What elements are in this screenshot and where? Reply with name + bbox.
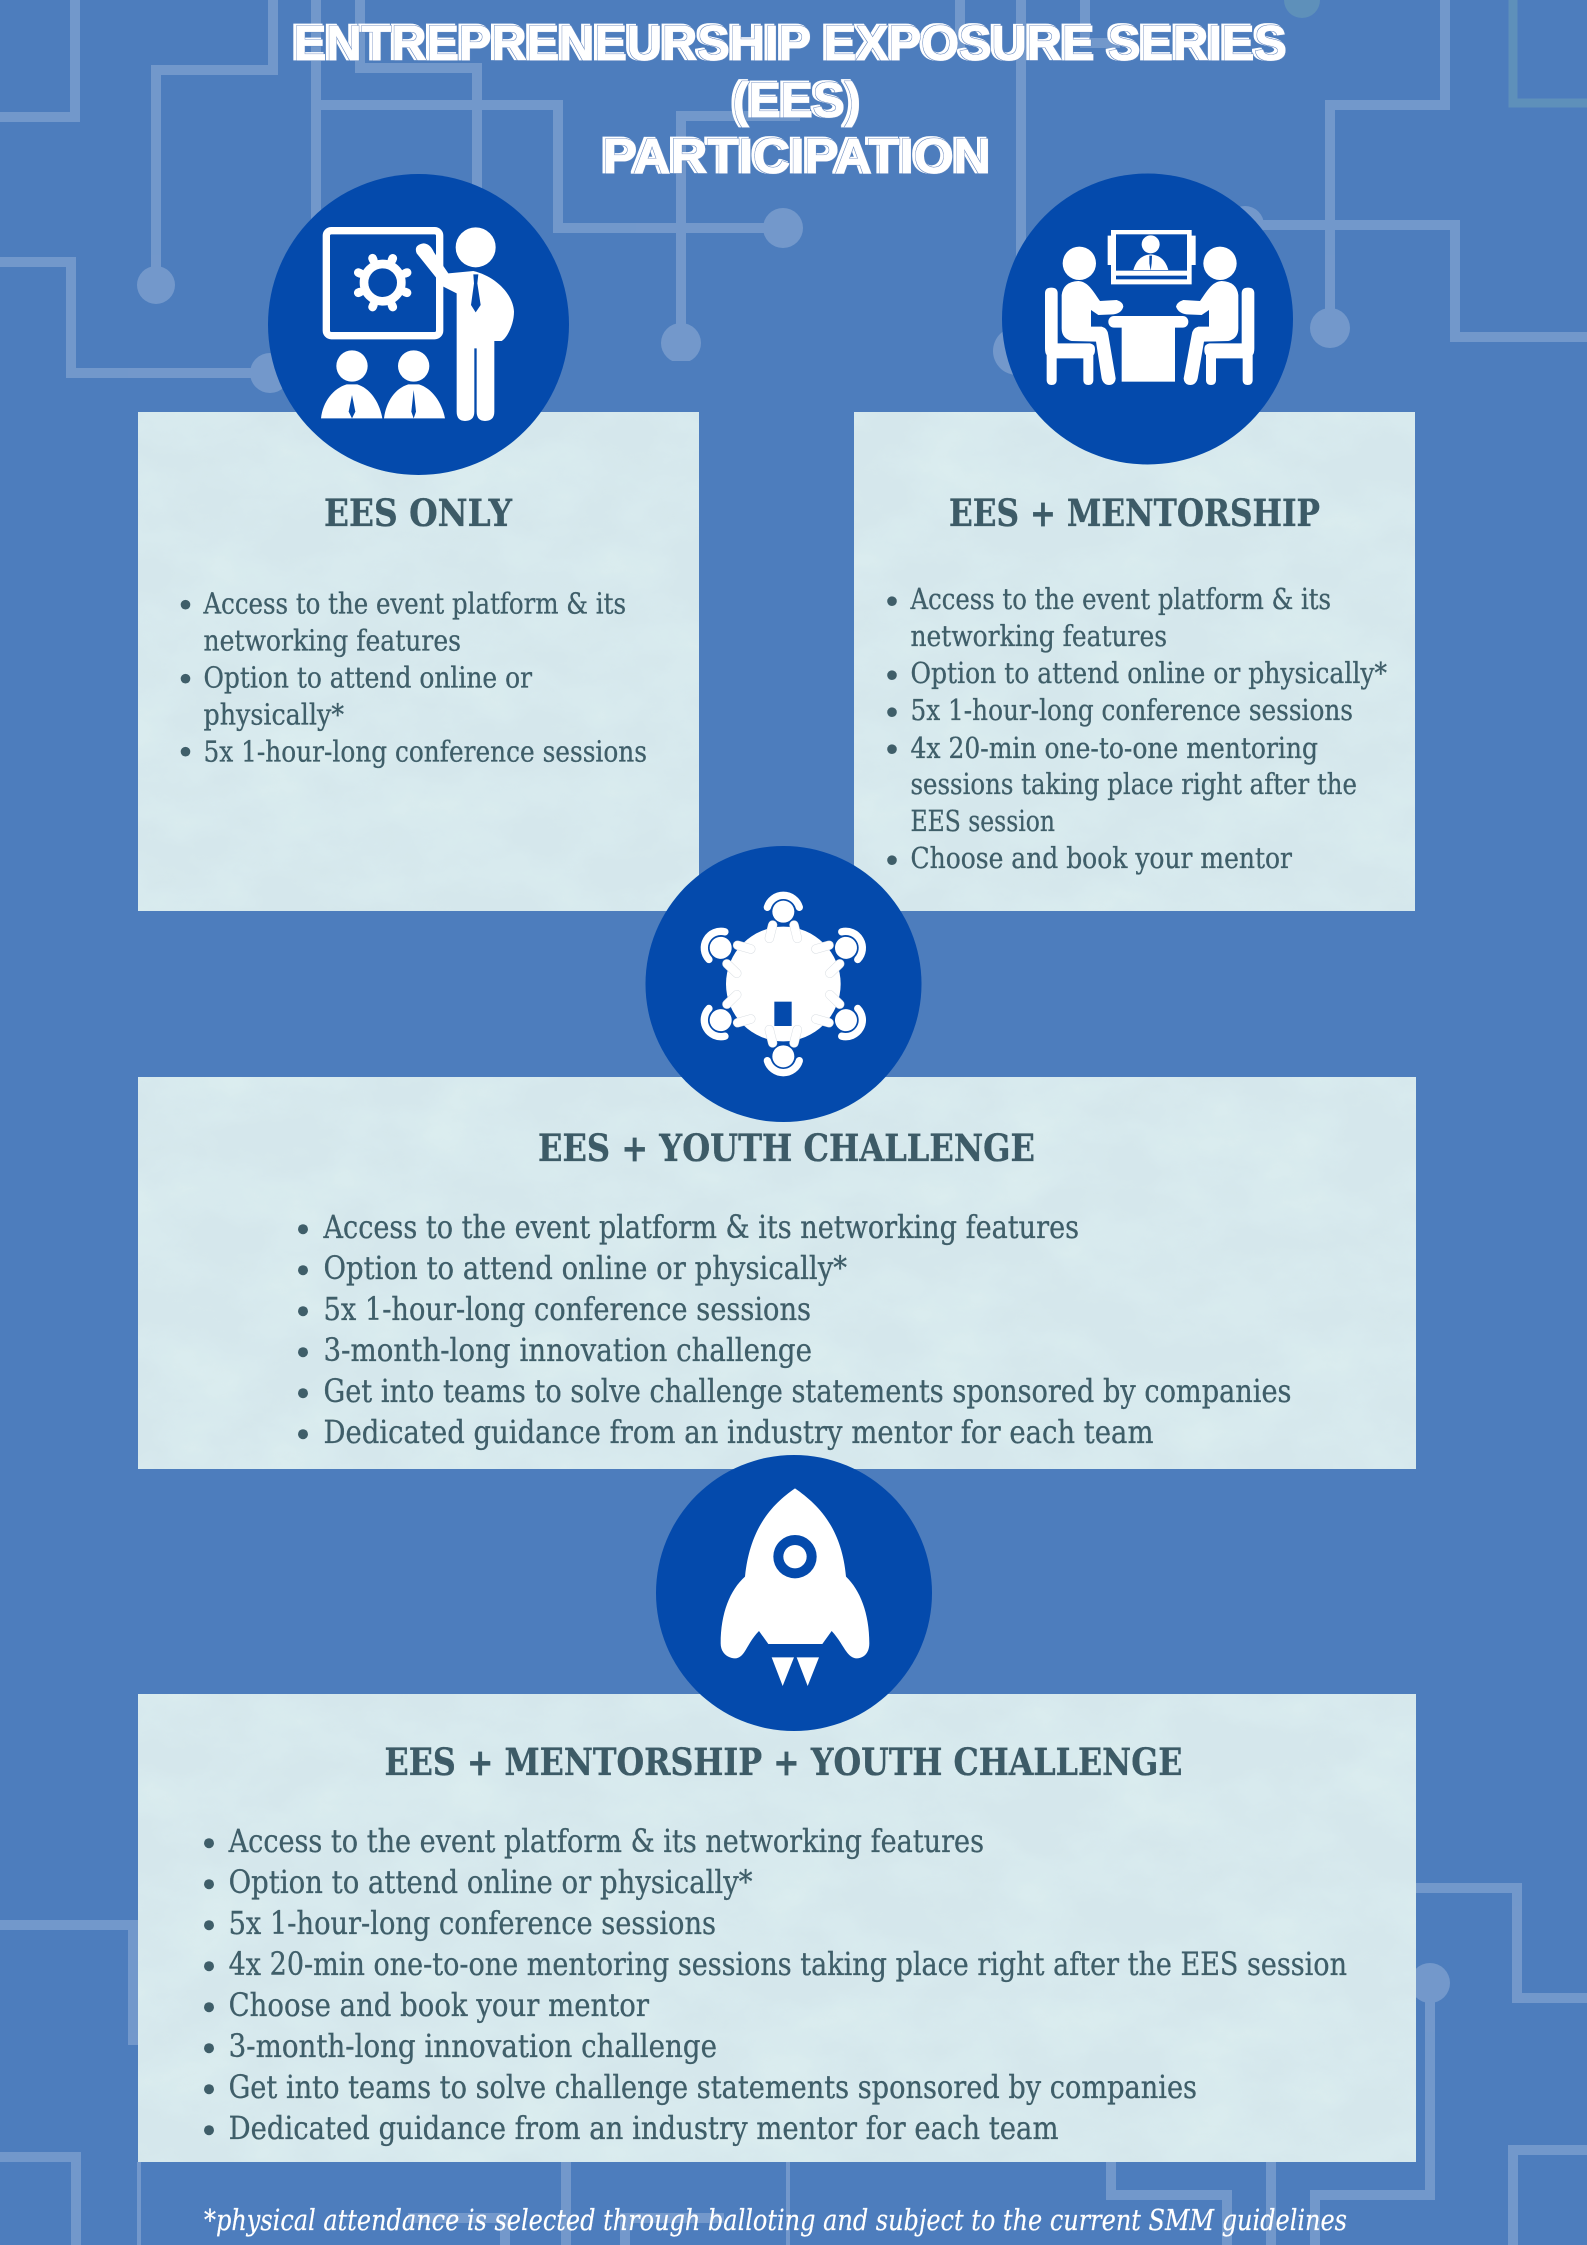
- list: combined package benefits: 3-month-long innovation challenge: [229, 2029, 717, 2065]
- panel: EES + youth challenge: [138, 1077, 1416, 1469]
- list: EES + youth challenge benefits: Get into teams to solve challenge statements sponsored by companies: [324, 1374, 1292, 1410]
- icon: presenter with gear board and audience: [268, 174, 569, 475]
- list: combined package benefits: 4x 20-min one-to-one mentoring sessions taking place right after the EES session: [229, 1947, 1347, 1983]
- list: combined package benefits: Option to attend online or physically*: [229, 1865, 753, 1901]
- title: [294, 17, 1287, 184]
- list: EES + mentorship benefits: sessions taking place right after the: [910, 767, 1357, 801]
- icon: rocket: [656, 1455, 932, 1731]
- heading: EES + mentorship + youth challenge: EES + MENTORSHIP + YOUTH CHALLENGE: [384, 1740, 1182, 1784]
- panel: EES + mentorship: [854, 412, 1415, 911]
- list: EES + mentorship benefits: Access to the event platform & its: [910, 582, 1331, 616]
- list: EES only benefits: networking features: [204, 624, 461, 658]
- list: EES + youth challenge benefits: [298, 1210, 1292, 1451]
- heading: EES only: EES ONLY: [324, 491, 513, 535]
- list: EES + mentorship benefits: 5x 1-hour-long conference sessions: [910, 693, 1353, 727]
- title: ENTREPRENEURSHIP EXPOSURE SERIES: [294, 17, 1287, 71]
- list: EES + youth challenge benefits: Access to the event platform & its networking features: [323, 1210, 1079, 1246]
- list: EES + youth challenge benefits: Dedicated guidance from an industry mentor for each team: [324, 1415, 1154, 1451]
- list: EES only benefits: [181, 587, 647, 769]
- list: combined package benefits: Choose and book your mentor: [229, 1988, 650, 2024]
- list: EES + mentorship benefits: [887, 582, 1387, 875]
- list: EES + mentorship benefits: networking features: [910, 619, 1167, 653]
- icon: video mentoring meeting: [1002, 174, 1293, 464]
- list: combined package benefits: Access to the event platform & its networking features: [228, 1824, 984, 1860]
- list: EES + youth challenge benefits: Option to attend online or physically*: [324, 1251, 847, 1287]
- list: EES + mentorship benefits: 4x 20-min one-to-one mentoring: [910, 731, 1318, 765]
- list: EES + mentorship benefits: Choose and book your mentor: [910, 841, 1292, 875]
- list: EES only benefits: Option to attend online or: [204, 661, 532, 695]
- list: combined package benefits: Get into teams to solve challenge statements sponsored by companies: [229, 2070, 1197, 2106]
- list: EES + youth challenge benefits: 5x 1-hour-long conference sessions: [324, 1292, 811, 1328]
- footnote: *physical attendance is selected through balloting and subject to the current SMM guidelines: [204, 2203, 1347, 2237]
- background circuit pattern: teal top right: [1284, 0, 1587, 103]
- list: combined package benefits: Dedicated guidance from an industry mentor for each team: [229, 2111, 1059, 2147]
- list: EES + mentorship benefits: Option to attend online or physically*: [910, 656, 1387, 690]
- list: EES + mentorship benefits: EES session: [910, 804, 1055, 838]
- list: EES only benefits: 5x 1-hour-long conference sessions: [204, 735, 647, 769]
- icon: roundtable of six people: [646, 846, 922, 1122]
- background circuit pattern: top: [0, 0, 1587, 393]
- title: (EES): [733, 74, 861, 128]
- title: PARTICIPATION: [603, 130, 991, 184]
- list: EES only benefits: physically*: [204, 698, 344, 732]
- list: combined package benefits: [204, 1824, 1347, 2147]
- panel: EES only: [138, 412, 699, 911]
- list: EES + youth challenge benefits: 3-month-long innovation challenge: [324, 1333, 812, 1369]
- heading: EES + mentorship: EES + MENTORSHIP: [949, 491, 1320, 535]
- background circuit pattern: bottom: [0, 1888, 1587, 2245]
- heading: EES + youth challenge: EES + YOUTH CHALLENGE: [538, 1126, 1035, 1170]
- list: combined package benefits: 5x 1-hour-long conference sessions: [229, 1906, 716, 1942]
- panel: EES + mentorship + youth challenge: [138, 1694, 1416, 2162]
- list: EES only benefits: Access to the event platform & its: [203, 587, 626, 621]
